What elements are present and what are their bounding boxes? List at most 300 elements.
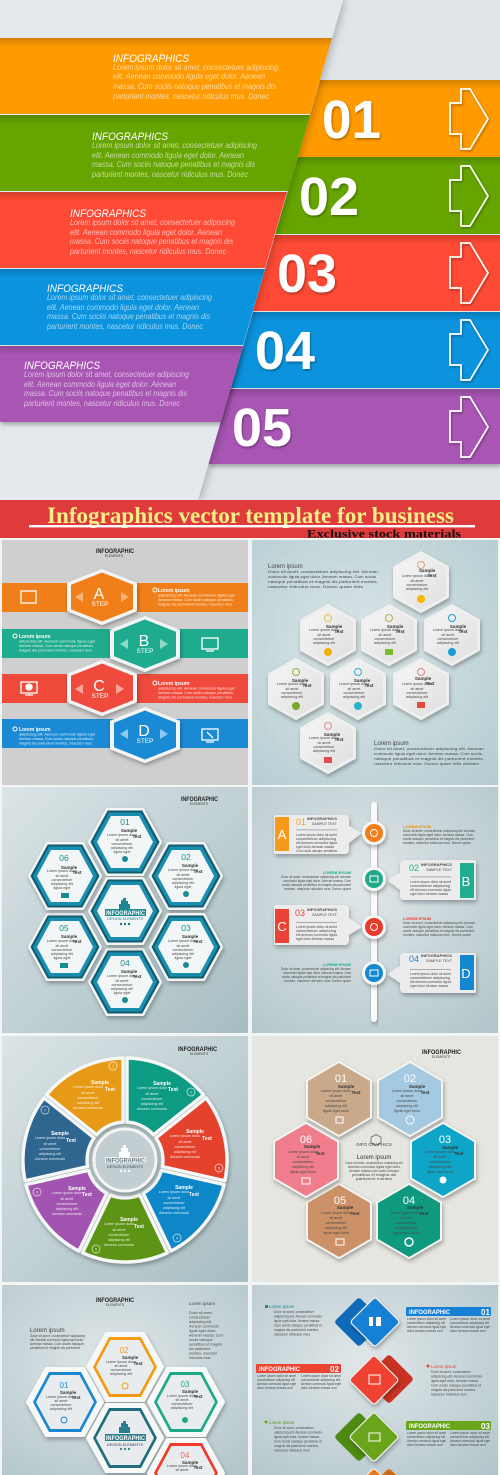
purple segment text xyxy=(33,1186,92,1216)
hexagon 04: Sample xyxy=(121,969,138,974)
hexagon 03 xyxy=(148,1368,224,1436)
hexagon 8: Lorem ipsum dolor xyxy=(277,682,308,686)
step C text xyxy=(153,681,235,700)
step C text: adipiscing elit. Aenean commodo ligula eget xyxy=(158,686,235,690)
text block right 1: commodo ligula eget dolor. Aenean massa. Cum xyxy=(403,833,473,837)
diamond red xyxy=(349,1354,414,1405)
red segment text: sit amet xyxy=(179,1140,191,1144)
logo heading: INFOGRAPHIC xyxy=(96,1297,134,1304)
red segment text: consectetuer xyxy=(174,1145,196,1149)
numbers 01 to 05: 01 xyxy=(322,90,381,150)
text block left 4 xyxy=(281,962,352,983)
hexagon 8 xyxy=(270,660,322,718)
orange segment text: Aenean commodo xyxy=(73,1106,103,1110)
callout box D: 04 xyxy=(409,954,419,964)
hexagon 3 xyxy=(394,660,448,718)
hexagon 4: Sample xyxy=(387,624,404,629)
hexagon 04: Text xyxy=(419,1211,429,1216)
blue segment text xyxy=(159,1185,199,1242)
hexagon 1: Text xyxy=(427,573,437,578)
text block top xyxy=(268,564,378,589)
text block 3: elit. Aenean commodo ligula eget dolor. Aenean xyxy=(70,228,222,237)
hexagon 01: Sample xyxy=(338,1084,355,1089)
hexagon 2: adipiscing elit xyxy=(437,641,459,645)
logo heading: INFOGRAPHIC xyxy=(422,1049,461,1056)
callout box A: Cum sociis natoque penatibus xyxy=(296,849,337,853)
hexagon 06: Lorem ipsum dolor xyxy=(47,869,78,873)
logo heading xyxy=(178,1046,217,1056)
hexagon 03: Text xyxy=(193,1394,203,1399)
text block right 1: sociis natoque penatibus et magnis dis parturient xyxy=(403,837,474,841)
hexagon 06: sit amet xyxy=(56,874,68,878)
logo heading: ELEMENTS xyxy=(432,1055,451,1059)
hexagon 05: ligula eget dolor xyxy=(323,1231,350,1235)
text block left 4: Dolor sit amet, consectetuer adipiscing elit. Aenean xyxy=(281,967,351,971)
hexagon 06: 06 xyxy=(59,853,69,863)
hexagon 05: Lorem ipsum dolor xyxy=(47,939,78,943)
numbers 01 to 05: 04 xyxy=(255,321,315,381)
callout box A: eget dolor Aenean massa xyxy=(296,845,335,849)
icon: step icons xyxy=(21,591,218,742)
hexagon 02: Sample xyxy=(409,1084,426,1089)
header 03: dolor Aenean massa cum xyxy=(407,1443,443,1447)
hexagon 04: 04 xyxy=(403,1195,415,1207)
hexagon 06: consectetuer xyxy=(292,1160,314,1164)
header 03: Lorem ipsum dolor sit amet xyxy=(407,1431,446,1435)
callout box C: Lorem ipsum dolor sit amet xyxy=(296,925,337,929)
hexagon 03: sit amet xyxy=(176,1398,188,1402)
logo heading: INFOGRAPHIC xyxy=(181,796,218,803)
callout box B: elit Aenean commodo ligula xyxy=(410,888,452,892)
step A text: Aenean massa. Cum sociis natoque penatibus xyxy=(158,598,233,602)
center hexagon with logo xyxy=(88,1404,162,1472)
callout box C: eget dolor Aenean massa xyxy=(296,937,335,941)
panel: main ribbons infographic xyxy=(0,0,500,500)
hexagon 01: ligula eget dolor xyxy=(323,1109,350,1113)
green segment text: Aenean commodo xyxy=(104,1243,134,1247)
step A hexagon xyxy=(68,570,136,624)
hexagon 05: Sample xyxy=(337,1205,354,1210)
hexagon 04: Text xyxy=(132,974,142,979)
hexagon 4: adipiscing elit xyxy=(374,641,396,645)
callout box B: Lorem ipsum dolor sit amet xyxy=(410,880,451,884)
hexagon 02: adipiscing elit xyxy=(110,1372,132,1376)
teal segment text: Lorem ipsum dolor xyxy=(137,1086,168,1090)
hexagon 02: consectetuer xyxy=(172,877,194,881)
side text 3: ligula eget dolor. Aenean massa. xyxy=(274,1435,320,1439)
callout box C: C xyxy=(277,919,287,934)
text block right 1: montes, nascetur ridiculus mus. Donec quam xyxy=(403,841,471,845)
text block right 3 xyxy=(403,916,475,937)
hexagon 01: Lorem ipsum dolor xyxy=(107,833,138,837)
hexagon 01: 01 xyxy=(120,817,130,827)
hexagon 03: adipiscing elit xyxy=(171,1406,193,1410)
hexagon 03 xyxy=(150,914,222,980)
text block 5: parturient montes, nascetur ridiculus mus. Donec xyxy=(23,399,180,408)
text block left 2: commodo ligula eget dolor. Aenean massa. Cum xyxy=(283,879,351,883)
side text 3: Cum sociis natoque penatibus et xyxy=(274,1440,322,1444)
step B text: Lorem ipsum xyxy=(19,634,51,640)
purple segment text: Text xyxy=(82,1192,92,1198)
hexagon 04: Lorem ipsum dolor xyxy=(167,1464,198,1468)
numbers 01 to 05: 05 xyxy=(232,398,292,458)
callout box A: 01 xyxy=(296,817,306,827)
callout box B: SAMPLE TEXT xyxy=(426,868,453,872)
hexagon 1: consectetuer xyxy=(406,583,428,587)
callout box A: consectetuer adipiscing xyxy=(296,837,336,841)
hexagon 02 xyxy=(88,1334,162,1400)
header 01: INFOGRAPHIC xyxy=(409,1310,451,1316)
logo heading xyxy=(422,1049,461,1059)
hexagon 7: adipiscing elit xyxy=(313,749,335,753)
side text 3: adipiscing elit. Aenean commodo xyxy=(274,1430,322,1434)
purple segment text: Sample xyxy=(68,1186,86,1192)
text block 1 xyxy=(112,53,278,101)
hexagon 2 xyxy=(426,606,478,664)
text block right: Aenean commodo xyxy=(189,1324,219,1328)
hexagon 03: sit amet xyxy=(177,944,189,948)
hexagon 05: consectetuer xyxy=(325,1221,347,1225)
timeline bar xyxy=(371,802,377,1022)
numbers 01 to 05 xyxy=(232,90,381,458)
panel: diamonds with headers xyxy=(252,1285,498,1475)
segment teal xyxy=(127,1058,204,1135)
text block 1: massa. Cum sociis natoque penatibus et magnis dis xyxy=(113,82,276,91)
text block 2: INFOGRAPHICS xyxy=(92,131,169,143)
orange segment text: Text xyxy=(105,1087,115,1093)
red segment text: Lorem ipsum dolor xyxy=(170,1134,201,1138)
text block 5: INFOGRAPHICS xyxy=(24,360,101,372)
step D text: Lorem ipsum xyxy=(19,727,51,733)
logo heading: ELEMENTS xyxy=(190,802,209,806)
green segment text: Lorem ipsum dolor xyxy=(104,1222,135,1226)
hexagon 2: Text xyxy=(458,629,468,634)
header 01: Lorem ipsum dolor sit amet xyxy=(407,1317,446,1321)
text block right 3: commodo ligula eget dolor. Aenean massa. Cum xyxy=(403,925,473,929)
hexagon 02: ligula eget xyxy=(175,885,191,889)
hexagon 5 xyxy=(302,606,354,664)
center circle: INFOGRAPHIC xyxy=(106,1158,145,1164)
panel: step hexagons A to D xyxy=(2,540,248,785)
hexagon 6 xyxy=(332,660,384,718)
text block 5: massa. Cum sociis natoque penatibus et magnis dis xyxy=(24,389,187,398)
step B text: Aenean massa. Cum sociis natoque penatibus xyxy=(19,644,93,648)
callout box C xyxy=(274,905,362,945)
teal segment text: adipiscing elit xyxy=(141,1102,163,1106)
green segment text: consectetuer xyxy=(108,1233,130,1237)
side text 1: nascetur ridiculus mus xyxy=(274,1332,310,1336)
segment navy xyxy=(8,1089,100,1181)
timeline nodes xyxy=(362,821,386,985)
hexagon 04 xyxy=(90,950,160,1014)
text block right 3: LOREM IPSUM xyxy=(403,916,432,921)
text block right 3: sociis natoque penatibus et magnis dis parturient xyxy=(403,929,474,933)
header 01: Lorem ipsum dolor sit amet xyxy=(450,1317,490,1321)
side text 3: Lorem ipsum xyxy=(269,1420,295,1425)
text block left xyxy=(30,1328,85,1350)
hexagon 4: Lorem ipsum dolor xyxy=(370,628,401,632)
hexagon 1: adipiscing elit xyxy=(406,587,428,591)
hexagon 03: 03 xyxy=(181,923,191,933)
hexagon 8: Sample xyxy=(292,678,309,683)
orange segment text xyxy=(73,1062,117,1110)
navy segment text: Lorem ipsum dolor xyxy=(35,1136,66,1140)
hexagon 03: Sample xyxy=(182,934,199,939)
hexagon 04: 04 xyxy=(120,958,130,968)
hexagon 01: 01 xyxy=(335,1073,347,1085)
hexagon 1 xyxy=(394,552,448,612)
step C hexagon xyxy=(68,662,136,714)
header 01: 01 xyxy=(481,1308,490,1317)
hexagon 03: consectetuer xyxy=(172,948,194,952)
hexagon 8: sit amet xyxy=(286,687,298,691)
text block right 1: Dolor sit amet, consectetuer adipiscing elit. Aenean xyxy=(403,829,475,833)
hexagon 05 xyxy=(30,914,100,980)
center text block: Dolor sit amet, consectetuer, adipiscing elit xyxy=(346,1161,402,1165)
text block right: montes, nascetur xyxy=(189,1352,218,1356)
hexagon 06: adipiscing elit xyxy=(51,882,73,886)
hexagon 01: ligula eget xyxy=(114,850,130,854)
step D hexagon xyxy=(112,708,178,762)
header 03: 03 xyxy=(481,1422,490,1431)
text block 4: INFOGRAPHICS xyxy=(47,283,124,295)
text block right: dis parturient xyxy=(189,1347,210,1351)
center text block: parturient montes xyxy=(356,1177,392,1181)
hexagon 01: sit amet xyxy=(116,838,128,842)
step C text: magnis dis parturient montes, nascetur mus xyxy=(158,696,232,700)
hexagon 03: sit amet xyxy=(434,1155,446,1159)
callout box D: consectetuer adipiscing xyxy=(410,976,450,980)
hexagon 06: Text xyxy=(315,1151,325,1156)
diamond blue xyxy=(334,1297,400,1347)
segment orange xyxy=(46,1035,154,1143)
hexagon 02: Lorem ipsum dolor xyxy=(106,1360,137,1364)
step D text: magnis dis parturient montes, nascetur mus xyxy=(19,742,92,746)
callout box C: consectetuer adipiscing xyxy=(296,929,336,933)
hexagon 5: adipiscing elit xyxy=(313,641,335,645)
header 02: dolor Aenean massa cum xyxy=(257,1386,293,1390)
panel: eight white hexagons xyxy=(252,540,498,785)
panel: title banner xyxy=(0,500,500,540)
hexagon 8: adipiscing elit xyxy=(281,695,303,699)
logo heading xyxy=(96,548,134,558)
teal segment text: Aenean commodo xyxy=(137,1107,167,1111)
hexagon 2: sit amet xyxy=(442,633,454,637)
callout box A: INFOGRAPHICS xyxy=(307,817,338,821)
callout box D: Lorem ipsum dolor sit amet xyxy=(410,972,451,976)
side text 1: Cum sociis natoque penatibus et xyxy=(274,1324,322,1328)
hexagon 6: Lorem ipsum dolor xyxy=(339,682,370,686)
hexagon 01: adipiscing elit xyxy=(50,1407,72,1411)
hexagon 01: Text xyxy=(132,834,142,839)
hexagon 04: Text xyxy=(193,1465,203,1470)
hexagon 01: adipiscing elit xyxy=(111,846,133,850)
hexagon 03: consectetuer xyxy=(429,1160,451,1164)
text block 5: elit. Aenean commodo ligula eget dolor. Aenean xyxy=(24,380,176,389)
hexagon 01: consectetuer xyxy=(111,842,133,846)
hexagon 01: Sample xyxy=(121,828,138,833)
navy segment text: adipiscing elit xyxy=(39,1152,61,1156)
hexagon 06 xyxy=(274,1124,338,1196)
hexagon 02: adipiscing elit xyxy=(396,1104,418,1108)
panel: timeline xyxy=(252,787,498,1033)
orange segment text: Sample xyxy=(91,1080,109,1086)
hexagon 06: consectetuer xyxy=(51,878,73,882)
text block left 4: montes, nascetur ridiculus mus. Donec quam xyxy=(284,979,351,983)
text block top: nascetur ridiculus mus. Donec quam felis xyxy=(268,585,363,589)
header 03: consectetuer adipiscing elit xyxy=(407,1435,445,1439)
hexagon 02: adipiscing elit xyxy=(172,881,194,885)
hexagon 02: sit amet xyxy=(401,1094,413,1098)
blue segment text: Text xyxy=(189,1192,199,1198)
callout box C: INFOGRAPHICS xyxy=(307,908,338,912)
header 02: Aenean commodo ligula eget xyxy=(257,1382,296,1386)
subtitle: Exclusive stock materials xyxy=(307,528,462,540)
text block 2: elit. Aenean commodo ligula eget dolor. Aenean xyxy=(92,151,244,160)
hexagon 01: sit amet xyxy=(330,1094,342,1098)
hexagon 03: ligula eget xyxy=(175,956,191,960)
hexagon 02: Lorem ipsum dolor xyxy=(392,1089,423,1093)
side text 3: magnis dis parturient montes, xyxy=(274,1444,319,1448)
panel: seven segment circle xyxy=(2,1035,254,1286)
text block left 2: montes, nascetur ridiculus mus. Donec quam xyxy=(284,887,351,891)
text block 4 xyxy=(46,283,212,331)
text block bottom: Dolor sit amet, consectetuer adipiscing elit. Aenean xyxy=(374,747,484,751)
purple segment text: Lorem ipsum dolor xyxy=(52,1191,83,1195)
step C hexagon: C xyxy=(93,678,105,695)
hexagon 02: Text xyxy=(193,869,203,874)
center text block: INFO GRAPHICS xyxy=(356,1142,392,1147)
header 03 xyxy=(406,1421,491,1447)
hexagon 05: adipiscing elit xyxy=(325,1226,347,1230)
callout box D: elit Aenean commodo ligula xyxy=(410,980,452,984)
hexagon 02: Sample xyxy=(122,1355,139,1360)
green segment text: Sample xyxy=(120,1217,138,1223)
text block left: Dolor sit amet, consectetuer adipiscing xyxy=(30,1334,85,1338)
hexagon 02: Lorem ipsum dolor xyxy=(168,868,199,872)
hexagon 04: consectetuer xyxy=(111,983,133,987)
step A hexagon: STEP xyxy=(92,601,108,608)
header 01: consectetuer adipiscing elit xyxy=(450,1321,489,1325)
navy segment text: consectetuer xyxy=(39,1147,61,1151)
side text 1: Lorem ipsum xyxy=(269,1304,295,1309)
numbers 01 to 05: 03 xyxy=(277,244,337,304)
center hexagon with logo xyxy=(90,878,160,944)
blue segment text: sit amet xyxy=(168,1196,180,1200)
hexagon 04: Lorem ipsum dolor xyxy=(391,1211,422,1215)
center hexagon with logo: DESIGN ELEMENTS xyxy=(107,917,144,921)
text block right: ridiculus mus. xyxy=(189,1356,212,1360)
text block 5 xyxy=(23,360,189,408)
text block right: consectetuer xyxy=(189,1316,211,1320)
text block left: Aenean massa. Cum sociis natoque xyxy=(30,1342,84,1346)
header 03: INFOGRAPHIC xyxy=(409,1424,451,1430)
callout box B xyxy=(387,860,476,900)
blue segment text: Aenean commodo xyxy=(159,1211,189,1215)
hexagon 04: sit amet xyxy=(400,1216,412,1220)
teal segment text: Text xyxy=(168,1087,178,1093)
side text 2 xyxy=(426,1364,482,1396)
text block bottom xyxy=(374,741,484,766)
center text block: Aenean massa cum sociis natoque xyxy=(349,1169,399,1173)
hexagon 5: Sample xyxy=(326,624,343,629)
text block right 3: montes, nascetur ridiculus mus. Donec quam xyxy=(403,933,471,937)
hexagon 01 xyxy=(308,1062,370,1136)
callout box C: SAMPLE TEXT xyxy=(312,913,338,917)
step C hexagon: STEP xyxy=(92,693,108,700)
center hexagon with logo: INFOGRAPHIC xyxy=(106,1435,145,1442)
text block 4: elit. Aenean commodo ligula eget dolor. Aenean xyxy=(47,303,199,312)
hexagon 06: Sample xyxy=(61,865,78,870)
hexagon 02: Text xyxy=(420,1090,430,1095)
hexagon 3: Text xyxy=(425,681,435,686)
hexagon 02: 02 xyxy=(181,852,191,862)
text block 2: Lorem ipsum dolor sit amet, consectetuer adipiscing xyxy=(92,141,257,150)
text block top: commodo ligula eget dolor. Aenean massa. Cum sociis xyxy=(268,575,376,579)
hexagon 06: Sample xyxy=(304,1144,321,1149)
hexagon 6: Sample xyxy=(354,678,371,683)
numbers 01 to 05: 02 xyxy=(299,167,359,227)
hexagon 03: Lorem ipsum dolor xyxy=(167,1394,198,1398)
header 02: consectetuer adipiscing elit xyxy=(301,1378,340,1382)
header 02: Aenean commodo ligula eget xyxy=(301,1382,341,1386)
center text block: Aenean commodo ligula eget dolor xyxy=(348,1165,401,1169)
hexagon 01: Text xyxy=(71,1395,81,1400)
teal segment text: consectetuer xyxy=(141,1097,163,1101)
hexagon 01: sit amet xyxy=(55,1399,67,1403)
diamond green xyxy=(334,1412,399,1462)
hexagon 2: Lorem ipsum dolor xyxy=(433,628,464,632)
hexagon 06: ligula eget dolor xyxy=(290,1170,317,1174)
hexagon 4 xyxy=(362,606,416,664)
purple segment text: Aenean commodo xyxy=(52,1212,82,1216)
green segment text: 5 xyxy=(95,1248,97,1252)
hexagon 02 xyxy=(378,1062,442,1136)
hexagon 2: Sample xyxy=(450,624,467,629)
text block 3 xyxy=(69,208,235,256)
center text block xyxy=(346,1134,402,1181)
step B hexagon: STEP xyxy=(137,648,153,655)
side text 3 xyxy=(264,1420,322,1452)
hexagon 05: adipiscing elit xyxy=(51,952,73,956)
hexagon 05: Sample xyxy=(61,934,78,939)
ribbon 04 right xyxy=(231,312,500,388)
hexagon 5: Text xyxy=(334,629,344,634)
callout box B: 02 xyxy=(409,863,419,873)
text block 1: elit. Aenean commodo ligula eget dolor. Aenean xyxy=(113,72,265,81)
text block right 3: Dolor sit amet, consectetuer adipiscing elit. Aenean xyxy=(403,921,475,925)
hexagon 02: ligula eget dolor xyxy=(394,1109,421,1113)
hexagon 01: Lorem ipsum dolor xyxy=(321,1089,352,1093)
hexagon 03: Sample xyxy=(182,1389,199,1394)
hexagon 7: sit amet xyxy=(318,741,330,745)
ribbon 02 right xyxy=(275,157,500,234)
text block bottom: Lorem ipsum xyxy=(374,741,409,747)
step A text: magnis dis parturient montes, nascetur mus xyxy=(158,602,232,606)
icon: outline arrows xyxy=(450,89,488,457)
hexagon 7: consectetuer xyxy=(313,745,335,749)
title: Infographics vector template for business xyxy=(47,503,454,528)
header 01: dolor Aenean massa cum xyxy=(407,1329,443,1333)
callout box A: SAMPLE TEXT xyxy=(312,822,338,826)
hexagon 7: Lorem ipsum dolor xyxy=(309,736,340,740)
text block right: penatibus et magnis xyxy=(189,1342,222,1346)
hexagon 4: Text xyxy=(395,629,405,634)
hexagon 7: Text xyxy=(334,737,344,742)
hexagon 05: Lorem ipsum dolor xyxy=(321,1211,352,1215)
text block 1: parturient montes, nascetur ridiculus mus. Donec xyxy=(112,92,269,101)
hexagon 3: adipiscing elit xyxy=(406,695,428,699)
